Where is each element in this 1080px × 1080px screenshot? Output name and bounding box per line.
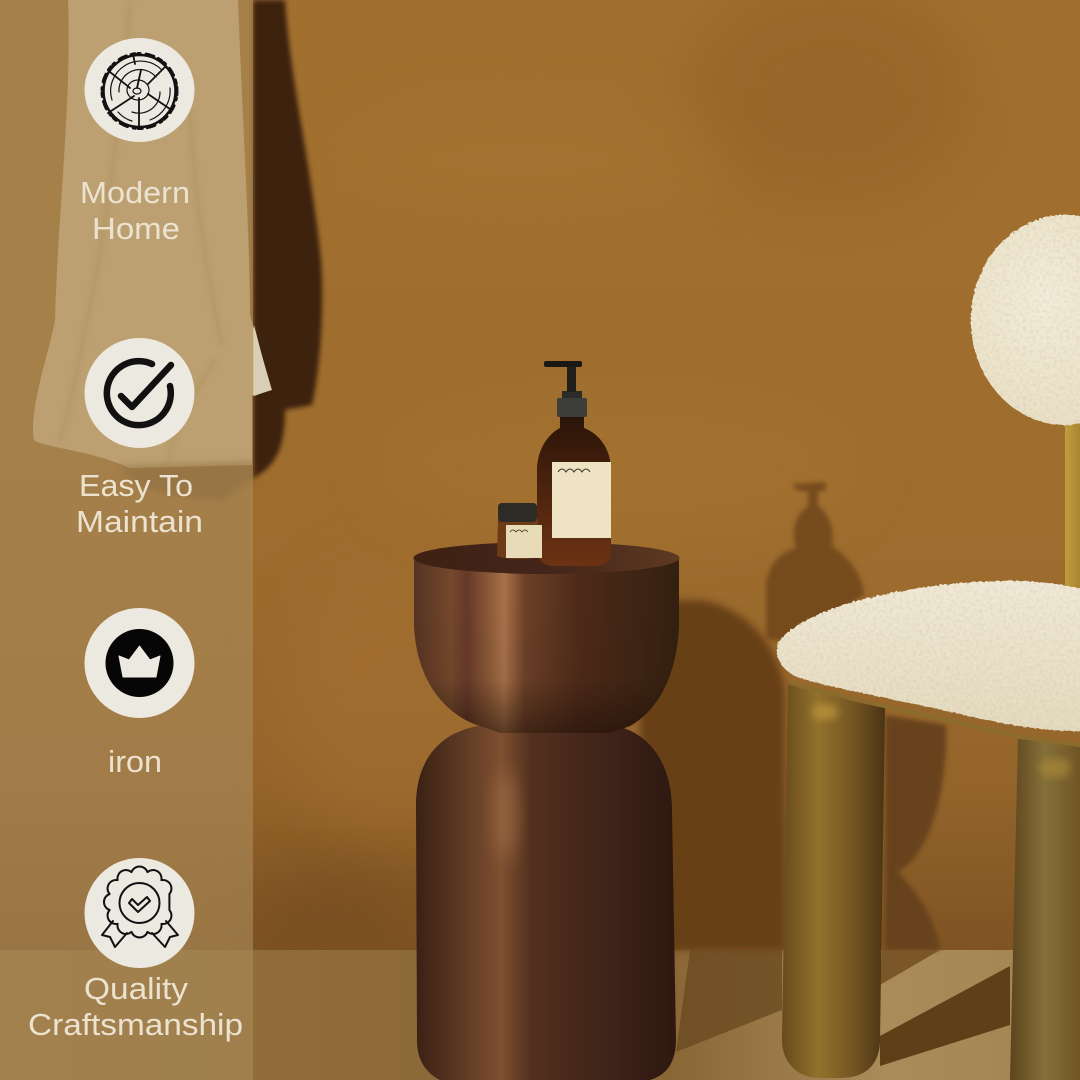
left translucent panel bbox=[0, 0, 253, 1080]
label: Quality Craftsmanship bbox=[28, 971, 243, 1042]
side table bbox=[414, 542, 680, 1080]
label: Quality Craftsmanship: Quality bbox=[84, 971, 189, 1006]
icon: tree rings bbox=[84, 38, 194, 142]
feature: quality craftsmanship bbox=[28, 858, 243, 1042]
icon: crown bbox=[84, 608, 194, 718]
label: Modern Home bbox=[80, 175, 190, 246]
label: Easy To Maintain bbox=[76, 468, 203, 539]
feature: modern home bbox=[80, 38, 194, 246]
chair: back post bbox=[1065, 420, 1080, 592]
shadow: chair on wall and floor bbox=[676, 715, 1010, 1066]
table: lower body bbox=[416, 725, 676, 1080]
label: Modern Home: Modern bbox=[80, 175, 190, 210]
shadow: hanging shirt on wall bbox=[253, 0, 322, 478]
feature: easy to maintain bbox=[76, 338, 203, 539]
chair: round back cushion bbox=[971, 215, 1080, 425]
shadow: bottle on wall bbox=[766, 482, 864, 640]
chair bbox=[777, 215, 1080, 1080]
soap jar bbox=[497, 503, 542, 559]
icon: rosette badge bbox=[84, 858, 194, 968]
pump bottle bbox=[537, 361, 611, 566]
table: upper bowl bbox=[414, 558, 679, 733]
background: floor bbox=[0, 950, 1080, 1080]
chair: left leg bbox=[782, 684, 885, 1078]
label: iron: iron bbox=[108, 744, 162, 779]
label: Quality Craftsmanship: Craftsmanship bbox=[28, 1007, 243, 1042]
table: top surface bbox=[414, 542, 680, 574]
shadow: table on wall bbox=[640, 600, 785, 950]
label: Easy To Maintain: Maintain bbox=[76, 504, 203, 539]
chair: right leg bbox=[1010, 738, 1080, 1080]
label: Easy To Maintain: Easy To bbox=[79, 468, 193, 503]
label: Modern Home: Home bbox=[92, 211, 180, 246]
feature: iron bbox=[84, 608, 194, 779]
icon: check circle bbox=[84, 338, 194, 448]
shirt hanging on wall bbox=[33, 0, 272, 500]
chair: seat rim bbox=[790, 683, 1080, 745]
chair: seat cushion bbox=[777, 581, 1080, 731]
